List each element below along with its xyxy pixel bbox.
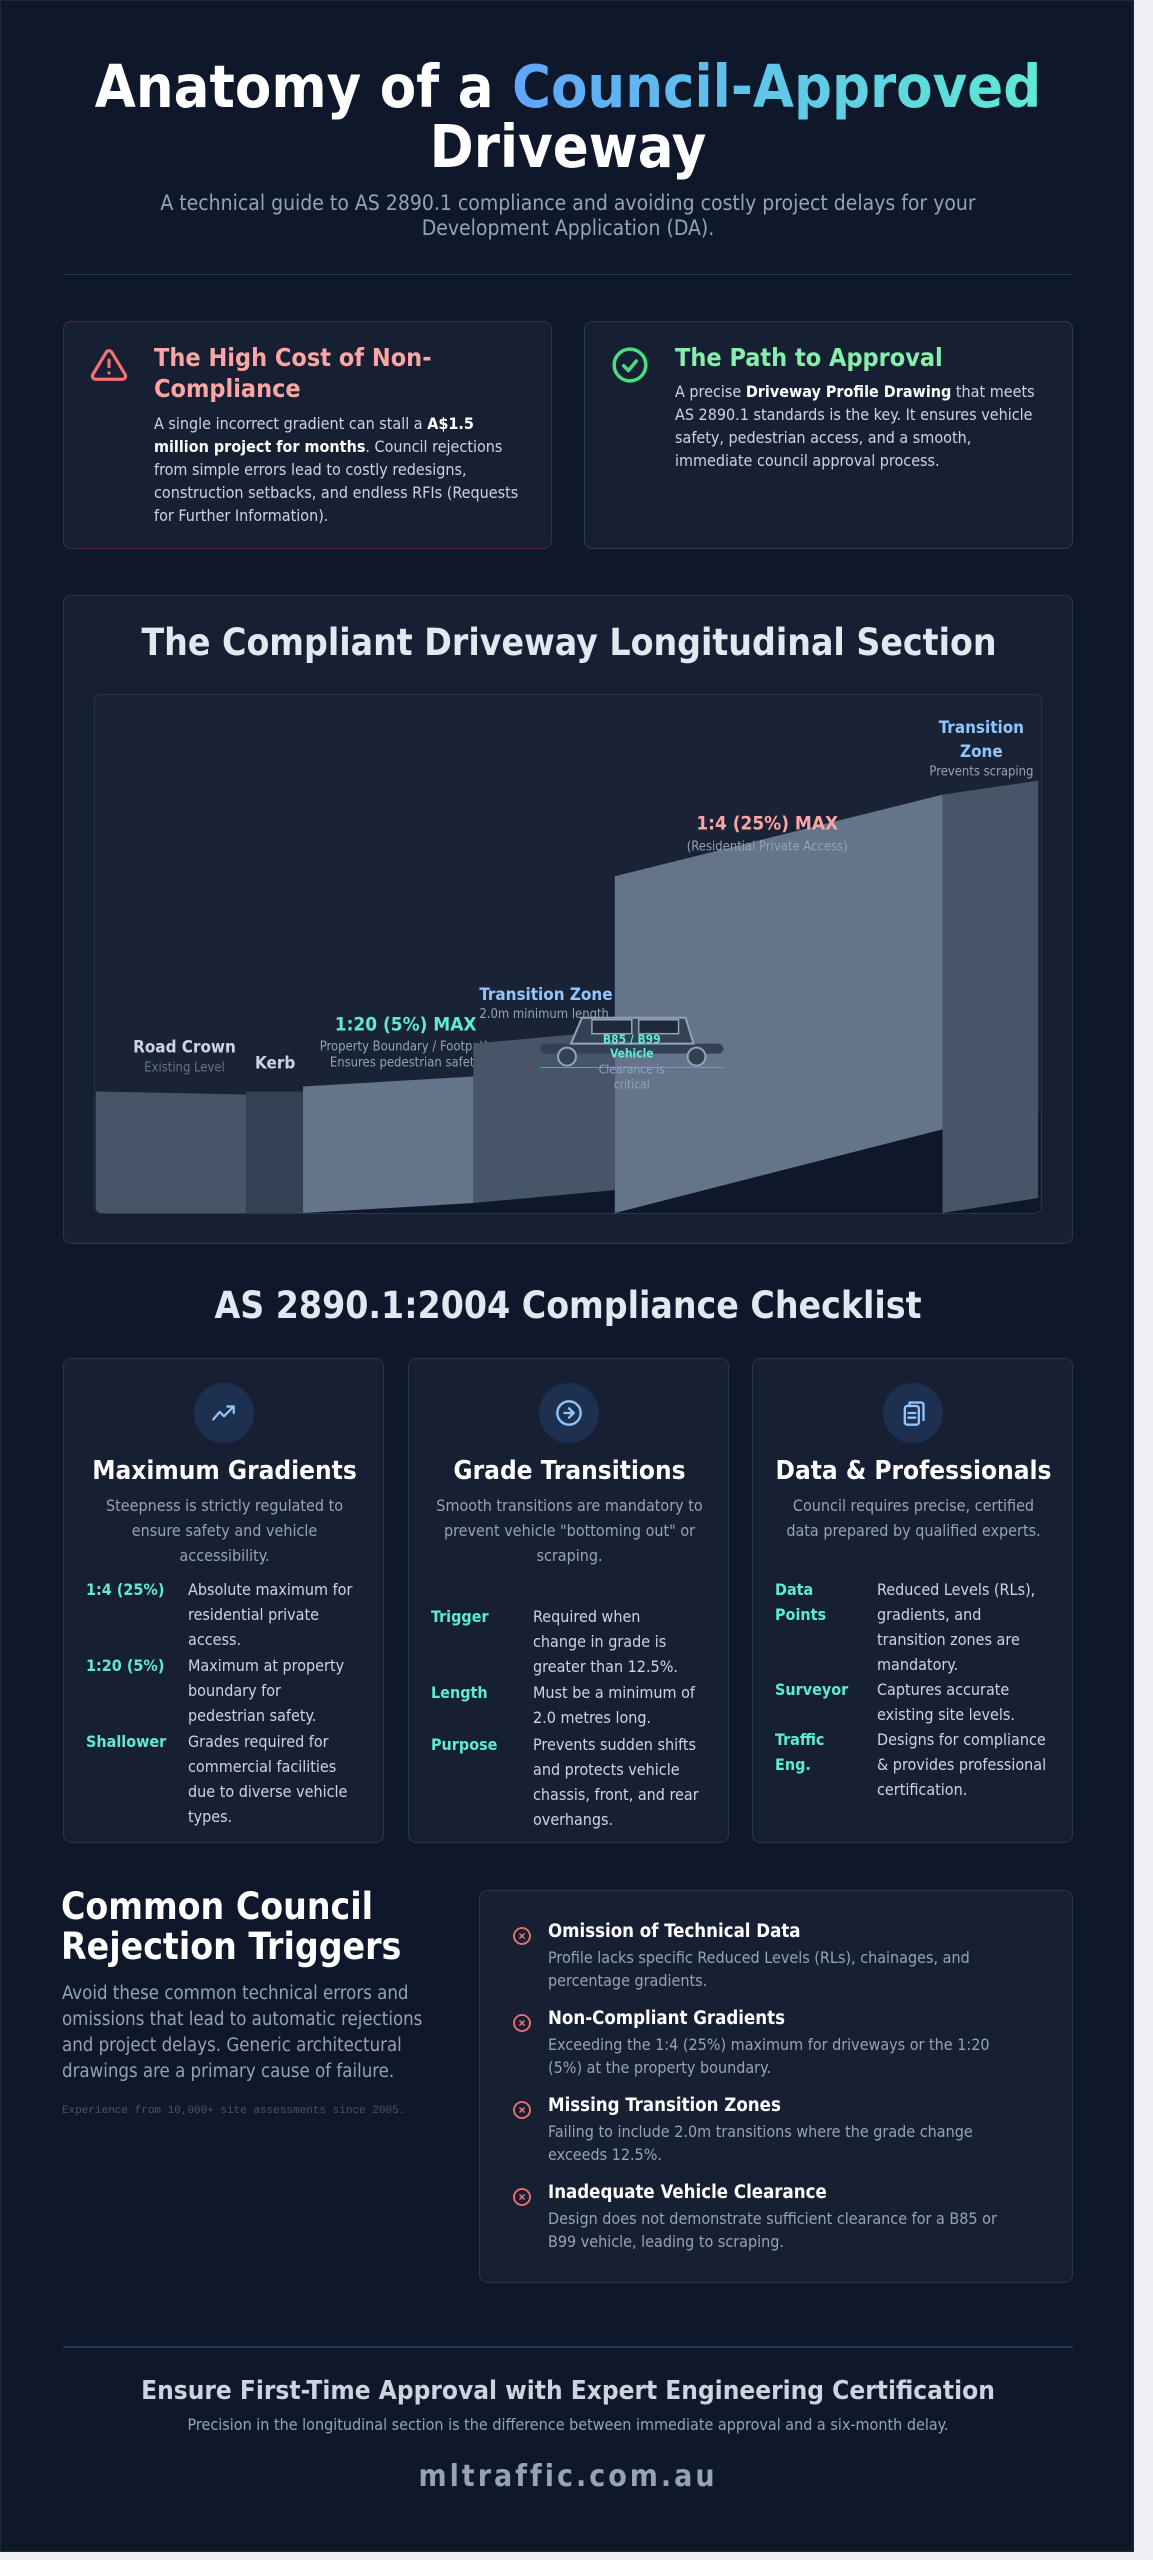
item 1: Omission of Technical Data (548, 1921, 801, 1942)
label: 1:4 max: (Residential Private Access) (687, 839, 848, 854)
label: road crown: Existing Level (144, 1061, 225, 1076)
desc: Council requires precise, certified data prepared by qualified experts. (786, 1496, 1041, 1540)
text: A single incorrect gradient can stall a A$1.5 million project for months. Council rejections from simple errors lead to costly redesigns, construction setbacks, and endless RFIs (Requests for Further Information). (154, 414, 518, 525)
footer heading: Ensure First-Time Approval with Expert Engineering Certification (141, 2376, 995, 2406)
rows: 1:20 (5%) (86, 1656, 164, 1675)
rows: Designs for compliance & provides professional certification. (877, 1730, 1046, 1799)
label: upper transition zone: Transition (939, 717, 1024, 737)
desc: Smooth transitions are mandatory to prevent vehicle "bottoming out" or scraping. (436, 1496, 703, 1565)
rows: Prevents sudden shifts and protects vehicle chassis, front, and rear overhangs. (533, 1735, 699, 1829)
label: transition zone: 2.0m minimum length (479, 1007, 609, 1022)
rows: Grades required for commercial facilities due to diverse vehicle types. (188, 1732, 347, 1826)
heading: Maximum Gradients (92, 1456, 357, 1486)
heading: The Compliant Driveway Longitudinal Section (141, 621, 997, 664)
rows (431, 1607, 699, 1829)
icon: clipboard (883, 1383, 943, 1443)
item 4: Inadequate Vehicle Clearance (548, 2182, 827, 2203)
rows: Captures accurate existing site levels. (877, 1680, 1015, 1724)
note: Experience from 10,000+ site assessments since 2005. (62, 2105, 405, 2117)
upper transition (943, 781, 1038, 1213)
icon: vehicle: B85 / B99 (603, 1033, 661, 1047)
item 3: Failing to include 2.0m transitions where the grade change exceeds 12.5%. (548, 2122, 973, 2164)
footpath (303, 1077, 473, 1213)
footer url: mltraffic.com.au (418, 2459, 718, 2494)
label: kerb: Kerb (255, 1053, 295, 1073)
rows: 1:4 (25%) (86, 1580, 164, 1599)
rows: Points (775, 1605, 826, 1624)
label: road crown (133, 1037, 236, 1076)
label: 1:20 max: 1:20 (5%) MAX (335, 1014, 477, 1036)
rows: Surveyor (775, 1680, 848, 1699)
title: Anatomy of a Council-Approved (95, 52, 1041, 121)
heading: compliance checklist: AS 2890.1:2004 Compliance Checklist (214, 1284, 922, 1327)
label: transition zone (479, 984, 613, 1022)
title (95, 52, 1041, 181)
ramp 1:4 (615, 795, 943, 1213)
footer text: Precision in the longitudinal section is the difference between immediate approval and a six-month delay. (188, 2415, 948, 2434)
item 1: Profile lacks specific Reduced Levels (RLs), chainages, and percentage gradients. (548, 1948, 970, 1990)
label: 1:4 max: 1:4 (25%) MAX (696, 812, 838, 834)
label: road crown: Road Crown (133, 1037, 236, 1057)
label: transition zone: Transition Zone (479, 984, 613, 1004)
panel: high cost of non-compliance (63, 321, 552, 549)
item 2: Exceeding the 1:4 (25%) maximum for driveways or the 1:20 (5%) at the property boundary. (548, 2035, 990, 2077)
rows: Required when change in grade is greater than 12.5%. (533, 1607, 678, 1676)
label: upper transition zone (929, 717, 1033, 780)
heading: Data & Professionals (776, 1456, 1051, 1486)
heading: The High Cost of Non-Compliance (154, 343, 432, 403)
icon: check circle (612, 347, 648, 383)
icon: vehicle: Vehicle (610, 1047, 654, 1061)
label: upper transition zone: Prevents scraping (929, 765, 1033, 780)
label: upper transition zone: Zone (960, 741, 1003, 761)
desc: Steepness is strictly regulated to ensure safety and vehicle accessibility. (106, 1496, 343, 1565)
rows (86, 1580, 352, 1826)
panel: path to approval (584, 321, 1073, 549)
icon: arrow circle (539, 1383, 599, 1443)
title: Driveway (430, 112, 706, 181)
label: 1:20 max (320, 1014, 492, 1071)
item 3 (513, 2095, 973, 2164)
icon: vehicle: critical (614, 1077, 650, 1091)
item 4: Design does not demonstrate sufficient clearance for a B85 or B99 vehicle, leading to scraping. (548, 2209, 997, 2251)
rows (775, 1580, 1046, 1799)
subtitle: A technical guide to AS 2890.1 compliance and avoiding costly project delays for your Development Application (DA). (160, 191, 976, 240)
road (96, 1091, 246, 1213)
panel: rejection list (479, 1890, 1073, 2283)
rows: Data (775, 1580, 813, 1599)
item 2 (513, 2008, 990, 2077)
chart: driveway profile (94, 694, 1042, 1214)
panel: data & professionals (752, 1358, 1073, 1843)
heading: rejection triggers: Common Council Rejection Triggers (61, 1885, 401, 1968)
rows: Length (431, 1683, 488, 1702)
rows: Shallower (86, 1732, 166, 1751)
kerb (246, 1091, 303, 1213)
item 2: Non-Compliant Gradients (548, 2008, 785, 2029)
rows: Trigger (431, 1607, 489, 1626)
label: 1:20 max: Ensures pedestrian safety (330, 1056, 481, 1071)
item 1 (513, 1921, 970, 1990)
label: 1:4 max (687, 812, 848, 854)
panel: grade transitions (408, 1358, 729, 1843)
rows: Maximum at property boundary for pedestrian safety. (188, 1656, 344, 1725)
label: 1:20 max: Property Boundary / Footpath (320, 1040, 492, 1055)
heading: Grade Transitions (453, 1456, 686, 1486)
item 4 (513, 2182, 997, 2251)
icon: vehicle (540, 1018, 723, 1091)
transition zone lower (473, 1031, 615, 1203)
icon: vehicle: Clearance is (599, 1063, 665, 1077)
rows: Traffic (775, 1730, 824, 1749)
icon: warning triangle (90, 349, 128, 381)
rows: Reduced Levels (RLs), gradients, and transition zones are mandatory. (877, 1580, 1035, 1674)
text: rejection intro: Avoid these common technical errors and omissions that lead to automatic rejections and project delays. Generic architectural drawings are a primary cause of failure. (62, 1983, 422, 2082)
rows: Eng. (775, 1755, 811, 1774)
rows: Purpose (431, 1735, 497, 1754)
panel: maximum gradients (63, 1358, 384, 1843)
panel: longitudinal section (63, 595, 1073, 1244)
text: A precise Driveway Profile Drawing that meets AS 2890.1 standards is the key. It ensures vehicle safety, pedestrian access, and a smooth, immediate council approval process. (675, 382, 1035, 470)
heading: The Path to Approval (675, 343, 943, 372)
rows: Absolute maximum for residential private access. (188, 1580, 352, 1649)
rows: Must be a minimum of 2.0 metres long. (533, 1683, 695, 1727)
item 3: Missing Transition Zones (548, 2095, 781, 2116)
icon: trend (194, 1383, 254, 1443)
